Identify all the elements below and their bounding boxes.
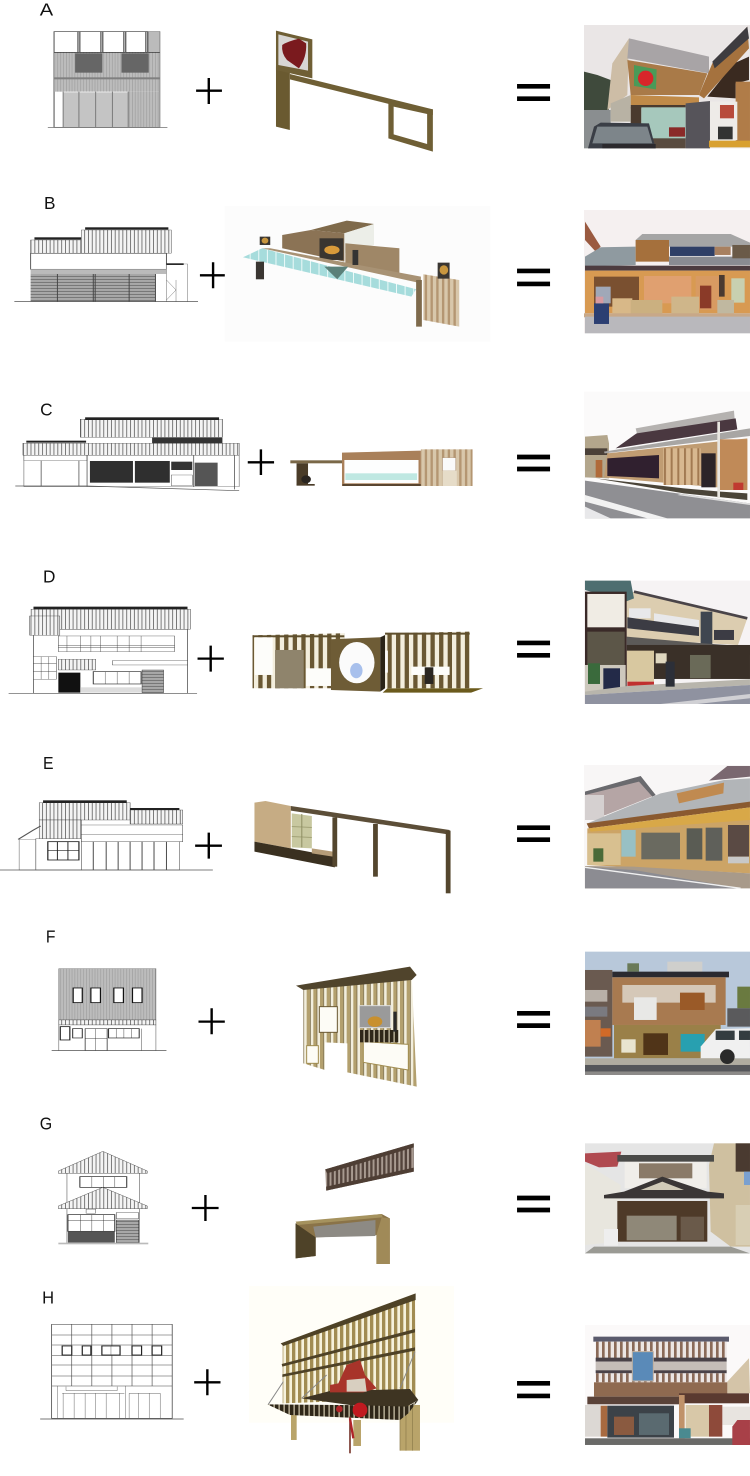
row E drawings [0, 753, 550, 893]
screen model D [253, 632, 483, 693]
row A drawings [40, 0, 550, 152]
label E: E [43, 753, 54, 773]
equals G [517, 1196, 550, 1212]
photo A [584, 25, 750, 148]
equals F [517, 1011, 550, 1028]
slat wall model F [296, 967, 417, 1087]
label A: A [40, 0, 53, 20]
row D drawings [9, 566, 550, 693]
canopy model B [225, 206, 490, 342]
row C drawings [15, 399, 550, 491]
label G: G [40, 1113, 52, 1133]
equals C [517, 455, 550, 471]
label H: H [42, 1287, 54, 1307]
plus G [192, 1195, 219, 1221]
photo D [584, 581, 750, 704]
row B drawings [14, 193, 550, 342]
equals D [517, 641, 550, 658]
upper lattice [325, 1143, 414, 1191]
plus C [248, 449, 274, 475]
photo E [584, 765, 750, 888]
row F drawings [46, 926, 550, 1051]
row E [0, 753, 750, 893]
label D: D [43, 566, 55, 587]
frame A [276, 31, 433, 152]
elevation H [40, 1324, 184, 1419]
row F [46, 926, 750, 1087]
plus B [200, 262, 226, 288]
slat canopy model H [249, 1286, 454, 1453]
label C: C [40, 399, 53, 420]
frame model C [290, 449, 473, 486]
row B [14, 193, 750, 342]
model G [296, 1143, 414, 1264]
equals A [517, 84, 550, 101]
row H [40, 1286, 750, 1453]
row A [40, 0, 750, 152]
plus H [194, 1369, 220, 1395]
row H drawings [40, 1287, 550, 1419]
photo C [584, 392, 750, 518]
elevation G [58, 1151, 148, 1244]
equals B [517, 269, 550, 286]
photo F [585, 952, 750, 1075]
elevation B [14, 227, 198, 302]
elevation A [48, 32, 167, 127]
row D [9, 566, 750, 704]
plus D [198, 646, 224, 672]
plus F [198, 1008, 225, 1034]
row G drawings [40, 1113, 550, 1264]
photo B [584, 210, 750, 333]
elevation E [0, 800, 213, 870]
label B: B [44, 193, 55, 213]
frame model E [254, 801, 451, 893]
elevation D [9, 607, 197, 693]
lower gate [296, 1214, 390, 1264]
red tree [330, 1360, 377, 1453]
plus E [195, 833, 222, 859]
row C [15, 392, 750, 518]
row G [40, 1113, 750, 1264]
equals E [517, 825, 550, 842]
elevation C [15, 417, 239, 491]
photo H [585, 1325, 750, 1445]
equals H [517, 1381, 550, 1398]
plus A [196, 78, 222, 104]
elevation F [52, 969, 166, 1051]
label F: F [46, 926, 55, 947]
photo G [585, 1143, 750, 1253]
